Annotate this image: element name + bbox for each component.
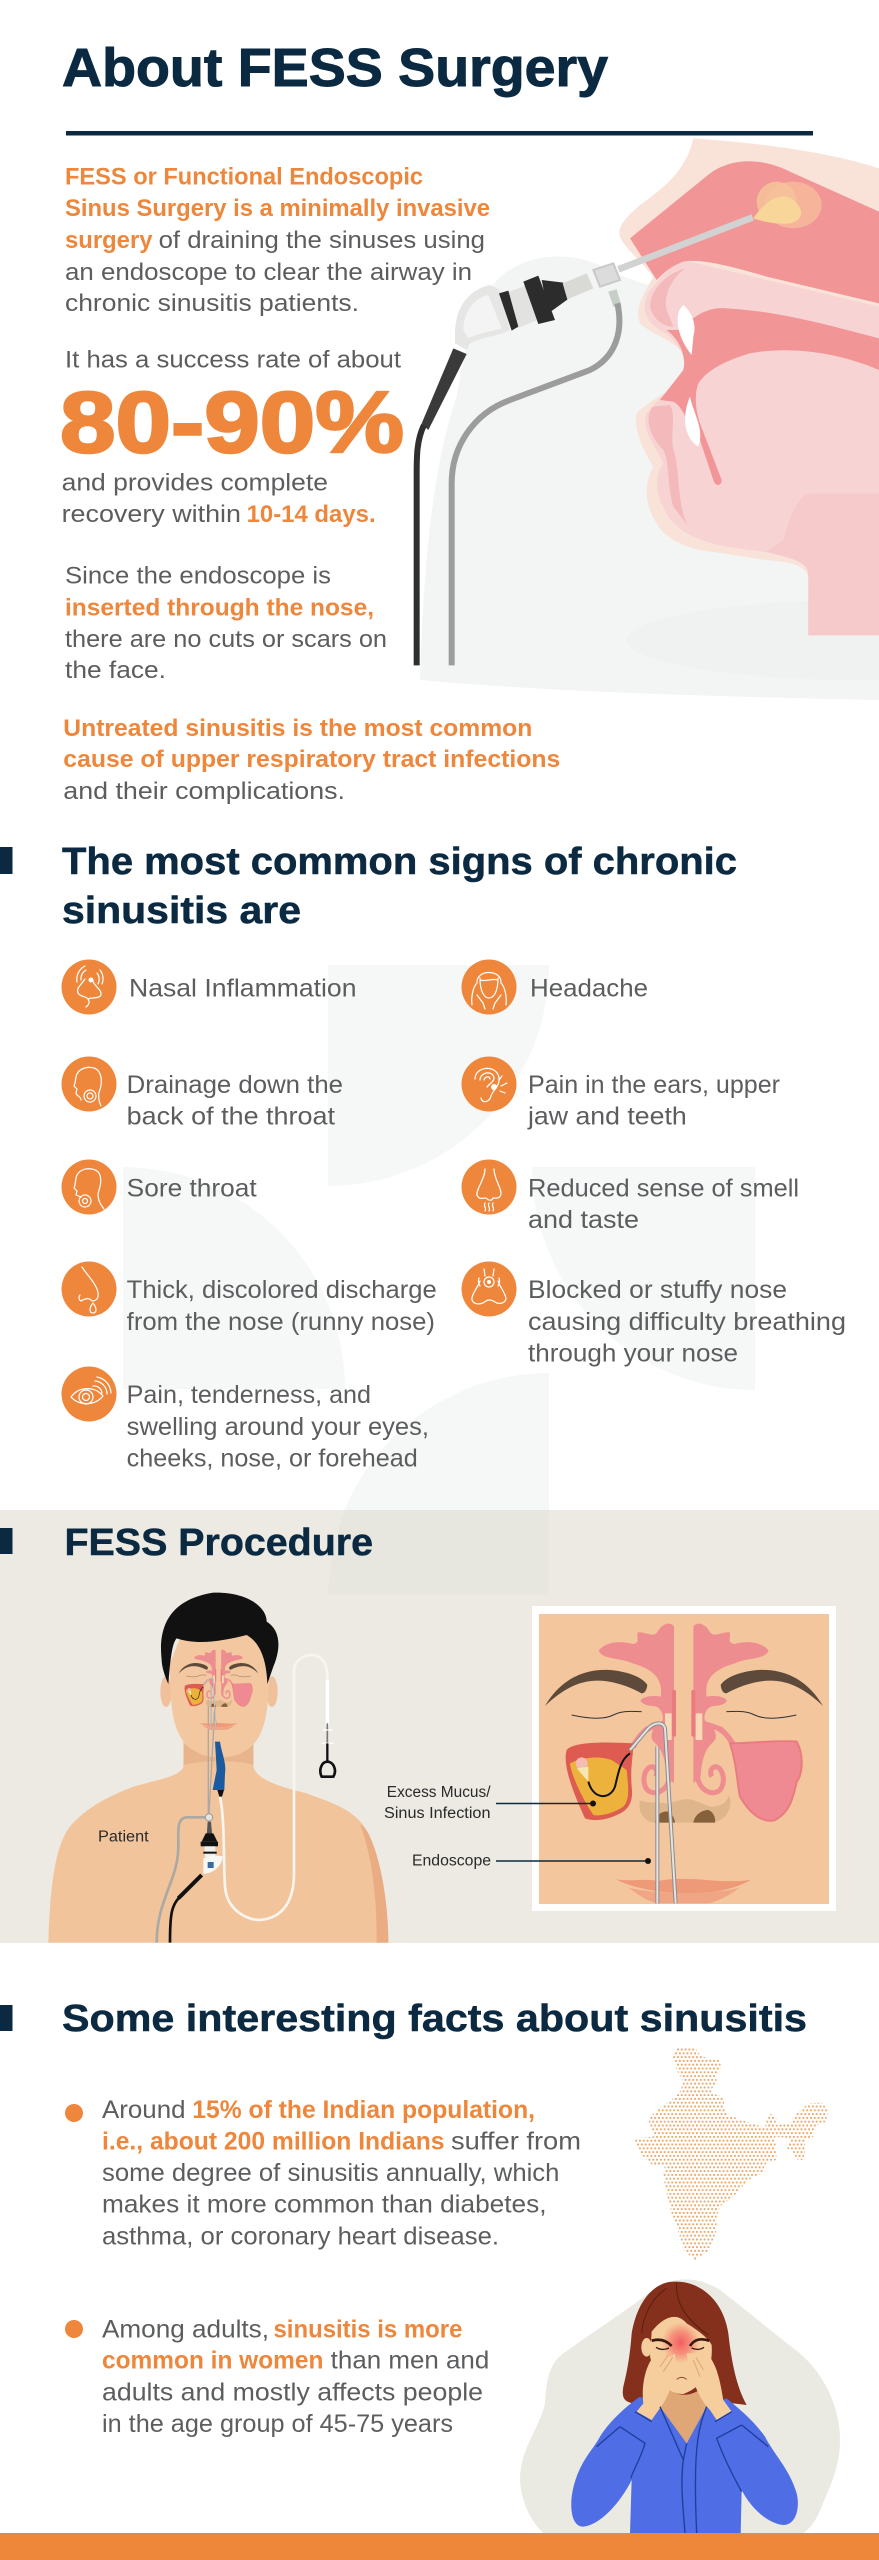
label: blocked nose — [528, 1276, 846, 1368]
section marker — [0, 1528, 12, 1554]
text: untreated sinusitis: Untreated sinusitis is the most common — [63, 715, 532, 742]
label: headache: Headache — [530, 974, 648, 1002]
label: patient: Patient — [98, 1828, 149, 1846]
fact: women — [65, 2316, 489, 2438]
icon: ear pain — [462, 1056, 516, 1112]
heading: procedure: FESS Procedure — [64, 1522, 373, 1564]
scope cables — [422, 348, 467, 430]
label: throat drainage: back of the throat — [127, 1102, 335, 1130]
sinus right side — [691, 1624, 769, 1793]
mucus — [678, 305, 695, 355]
icon: eye pain — [62, 1366, 116, 1422]
callout: excess mucus: Sinus Infection — [384, 1805, 490, 1822]
fact text: Among adults, — [102, 2316, 269, 2344]
big number: 80-90% — [60, 375, 404, 471]
fact text — [102, 2096, 581, 2250]
sinus left side — [599, 1624, 676, 1793]
text block: intro: an endoscope to clear the airway in — [65, 259, 472, 286]
icon: nasal inflammation — [62, 960, 116, 1014]
label: blocked nose: Blocked or stuffy nose — [528, 1276, 787, 1304]
background blob — [420, 257, 879, 700]
nose — [639, 1795, 730, 1823]
icon: throat drainage — [62, 1056, 116, 1112]
text: recovery: and provides complete — [62, 470, 328, 496]
section marker — [0, 847, 12, 874]
label: eye pain: swelling around your eyes, — [127, 1413, 429, 1441]
fact text — [102, 2316, 489, 2438]
endoscope — [630, 1723, 676, 1903]
hair — [623, 2282, 747, 2405]
text block: intro — [65, 164, 490, 317]
panel: FESS procedure — [0, 1510, 879, 1943]
text: no scars: the face. — [65, 657, 166, 684]
illustration: woman with sinus pain — [520, 2279, 840, 2533]
fact text: than men and — [331, 2346, 489, 2374]
fact text: makes it more common than diabetes, — [102, 2190, 546, 2218]
heading: signs: The most common signs of chronic — [62, 841, 737, 883]
text block: intro: Sinus Surgery is a minimally invasive — [65, 195, 490, 222]
hands — [637, 2353, 675, 2420]
label: throat drainage: Drainage down the — [127, 1071, 343, 1099]
text: success rate lead-in: It has a success rate of about — [65, 346, 401, 374]
label: reduced smell — [528, 1174, 799, 1234]
icon: sore throat — [62, 1160, 116, 1214]
text block: intro: surgery — [65, 227, 153, 254]
fact text: 15% of the Indian population, — [192, 2096, 535, 2124]
face — [641, 2338, 652, 2357]
icon: reduced smell — [462, 1160, 516, 1214]
rod — [618, 217, 753, 269]
text: untreated sinusitis: cause of upper respiratory tract infections — [63, 746, 560, 773]
sinus mass — [765, 182, 822, 228]
face outline — [619, 138, 879, 635]
label: sore throat: Sore throat — [127, 1174, 257, 1202]
label: eye pain: Pain, tenderness, and — [127, 1381, 371, 1409]
body — [48, 1727, 388, 1943]
label: reduced smell: Reduced sense of smell — [528, 1174, 799, 1202]
label: reduced smell: and taste — [528, 1206, 639, 1234]
mouth cavity — [660, 308, 879, 485]
fact: prevalence — [65, 2096, 581, 2250]
inner tissue — [645, 260, 879, 635]
label: runny nose — [127, 1276, 437, 1336]
label: eye pain: cheeks, nose, or forehead — [127, 1444, 418, 1472]
text: no scars: inserted through the nose, — [65, 594, 374, 622]
illustration: endoscope entering nose, side view of head — [417, 138, 879, 700]
fact text: in the age group of 45-75 years — [102, 2410, 453, 2438]
neck — [767, 493, 879, 635]
text: no scars: Since the endoscope is — [65, 562, 331, 590]
text block: intro: FESS or Functional Endoscopic — [65, 164, 423, 190]
heading: signs: sinusitis are — [62, 890, 301, 932]
hair — [161, 1593, 278, 1684]
heading: signs — [62, 841, 737, 932]
fact text: sinusitis is more — [274, 2316, 462, 2344]
shirt — [571, 2397, 798, 2533]
background decorative shapes — [123, 965, 755, 1594]
illustration: sinus anatomy close-up — [545, 1624, 823, 1903]
fact text: some degree of sinusitis annually, which — [102, 2159, 559, 2187]
frame: sinus close-up — [532, 1606, 836, 1911]
label: blocked nose: through your nose — [528, 1340, 738, 1368]
fact text: asthma, or coronary heart disease. — [102, 2222, 499, 2250]
label: ear pain: Pain in the ears, upper — [528, 1071, 780, 1099]
callout: endoscope: Endoscope — [412, 1852, 491, 1870]
icon: runny nose — [62, 1262, 116, 1316]
callout: endoscope — [412, 1852, 651, 1870]
text: no scars: there are no cuts or scars on — [65, 626, 387, 653]
fact text: adults and mostly affects people — [102, 2378, 483, 2406]
lips — [616, 1879, 752, 1893]
text: untreated sinusitis — [63, 715, 560, 805]
shirt lines — [597, 2407, 768, 2533]
eyebrows — [545, 1670, 647, 1706]
fact text: i.e., about 200 million Indians — [102, 2128, 444, 2156]
bullet — [65, 2320, 83, 2338]
text: recovery: 10-14 days. — [247, 501, 376, 528]
label: blocked nose: causing difficulty breathing — [528, 1308, 846, 1336]
fact text: suffer from — [451, 2128, 581, 2156]
fact text: common in women — [102, 2346, 323, 2374]
face background — [539, 1614, 829, 1904]
label: runny nose: Thick, discolored discharge — [127, 1276, 437, 1304]
text block: intro: chronic sinusitis patients. — [65, 290, 359, 317]
callout: excess mucus: Excess Mucus/ — [387, 1784, 491, 1801]
text block: intro: of draining the sinuses using — [159, 227, 485, 254]
blob — [520, 2279, 840, 2533]
tubes and scope — [208, 1700, 215, 1817]
closed eyes — [572, 1711, 796, 1718]
icon: headache — [462, 960, 516, 1014]
face — [170, 1630, 270, 1757]
illustration: dotted map of India — [635, 2047, 828, 2260]
callout: excess mucus — [384, 1784, 596, 1822]
text: untreated sinusitis: and their complications. — [63, 778, 345, 805]
infected sinus — [566, 1742, 633, 1820]
label: nasal inflammation: Nasal Inflammation — [129, 974, 356, 1002]
text: no scars — [65, 562, 387, 684]
label: eye pain — [127, 1381, 429, 1472]
icon: blocked nose — [462, 1262, 516, 1316]
label: ear pain — [527, 1071, 780, 1130]
text: recovery — [62, 470, 376, 528]
sinus maxillary right — [730, 1741, 802, 1821]
inflamed nose glow — [661, 2322, 700, 2363]
illustration: patient — [48, 1593, 388, 1943]
sinus cavity — [630, 161, 879, 303]
label: runny nose: from the nose (runny nose) — [127, 1308, 435, 1336]
scope body — [455, 285, 510, 350]
facial features — [652, 2339, 709, 2346]
label: throat drainage — [127, 1071, 343, 1130]
bullet — [65, 2104, 83, 2122]
title: About FESS Surgery — [62, 38, 608, 98]
footer bar — [0, 2533, 879, 2560]
text: recovery: recovery within — [62, 501, 241, 528]
heading: facts: Some interesting facts about sinusitis — [62, 1998, 807, 2040]
section marker — [0, 2005, 12, 2031]
ears — [160, 1676, 172, 1707]
label: ear pain: jaw and teeth — [527, 1102, 687, 1130]
nose tip and lower lip tissue — [650, 268, 685, 327]
mini sinus on patient's face — [179, 1650, 258, 1730]
fact text: Around — [102, 2096, 186, 2124]
neck — [660, 2387, 708, 2443]
